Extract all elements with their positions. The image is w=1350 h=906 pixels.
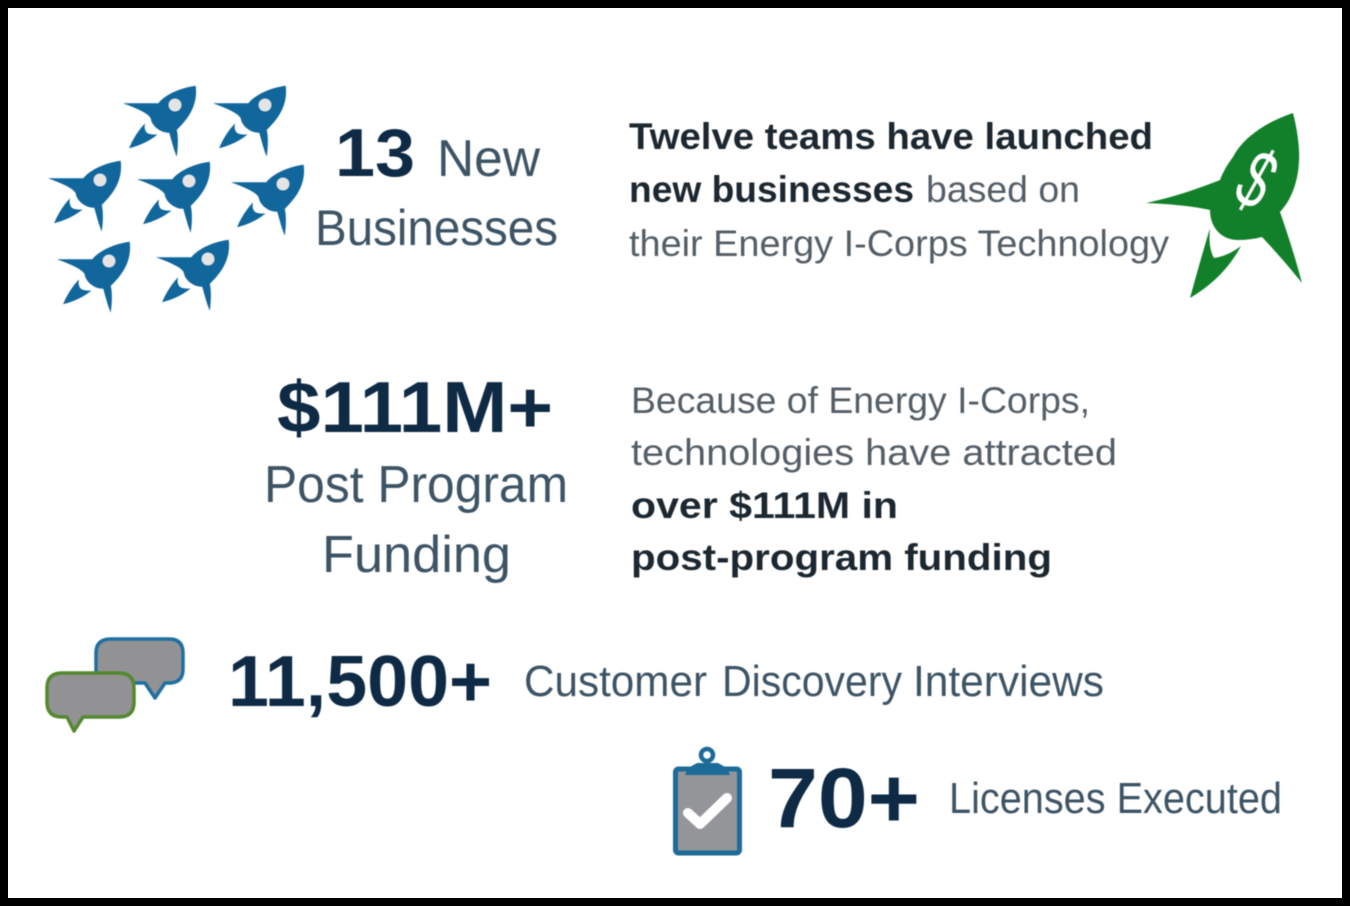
stat: 13 new businesses: Businesses	[315, 200, 558, 256]
stat: 70+ licenses executed: 70+	[768, 751, 920, 845]
stat: 13 new businesses: 13	[335, 115, 415, 191]
text: because of Energy I-Corps: post-program funding	[631, 537, 1052, 578]
text: because of Energy I-Corps: over $111M in	[631, 485, 898, 526]
stat: 70+ licenses executed: Licenses Executed	[949, 774, 1282, 823]
stat: 11,500+ customer discovery interviews: Discovery	[722, 657, 902, 706]
text: because of Energy I-Corps: technologies have attracted	[631, 432, 1117, 473]
stat: 11,500+ customer discovery interviews: Customer	[524, 657, 707, 706]
icon: green dollar rocket	[1146, 113, 1302, 298]
text: twelve teams launched: their Energy I-Corps Technology	[629, 223, 1170, 264]
stat: 70+ licenses executed	[768, 751, 1282, 845]
icon: clipboard with check	[676, 749, 740, 853]
icon: speech bubbles	[47, 639, 183, 731]
stat: 11,500+ customer discovery interviews: 11,500+	[228, 642, 492, 722]
text: twelve teams launched: based on	[926, 169, 1080, 210]
infographic content	[47, 86, 1302, 853]
stat: $111M+ post program funding: Funding	[322, 526, 511, 584]
stat: 11,500+ customer discovery interviews	[228, 642, 1104, 722]
stat: $111M+ post program funding: $111M+	[277, 368, 553, 448]
stat: 13 new businesses	[315, 115, 558, 256]
stat: 13 new businesses: New	[437, 130, 540, 188]
stat: $111M+ post program funding: Post Program	[264, 456, 568, 514]
stat: 11,500+ customer discovery interviews: Interviews	[913, 657, 1104, 706]
text: twelve teams launched: Twelve teams have launched	[629, 116, 1153, 157]
text: because of Energy I-Corps: Because of Energy I-Corps,	[631, 380, 1090, 421]
icon: flock of blue rockets	[48, 86, 304, 313]
text: twelve teams launched: new businesses	[629, 169, 914, 210]
text: because of Energy I-Corps	[631, 380, 1117, 578]
text: twelve teams launched	[629, 116, 1170, 264]
icon glyph: dollar sign: $	[1222, 131, 1292, 227]
stat: $111M+ post program funding	[264, 368, 568, 584]
